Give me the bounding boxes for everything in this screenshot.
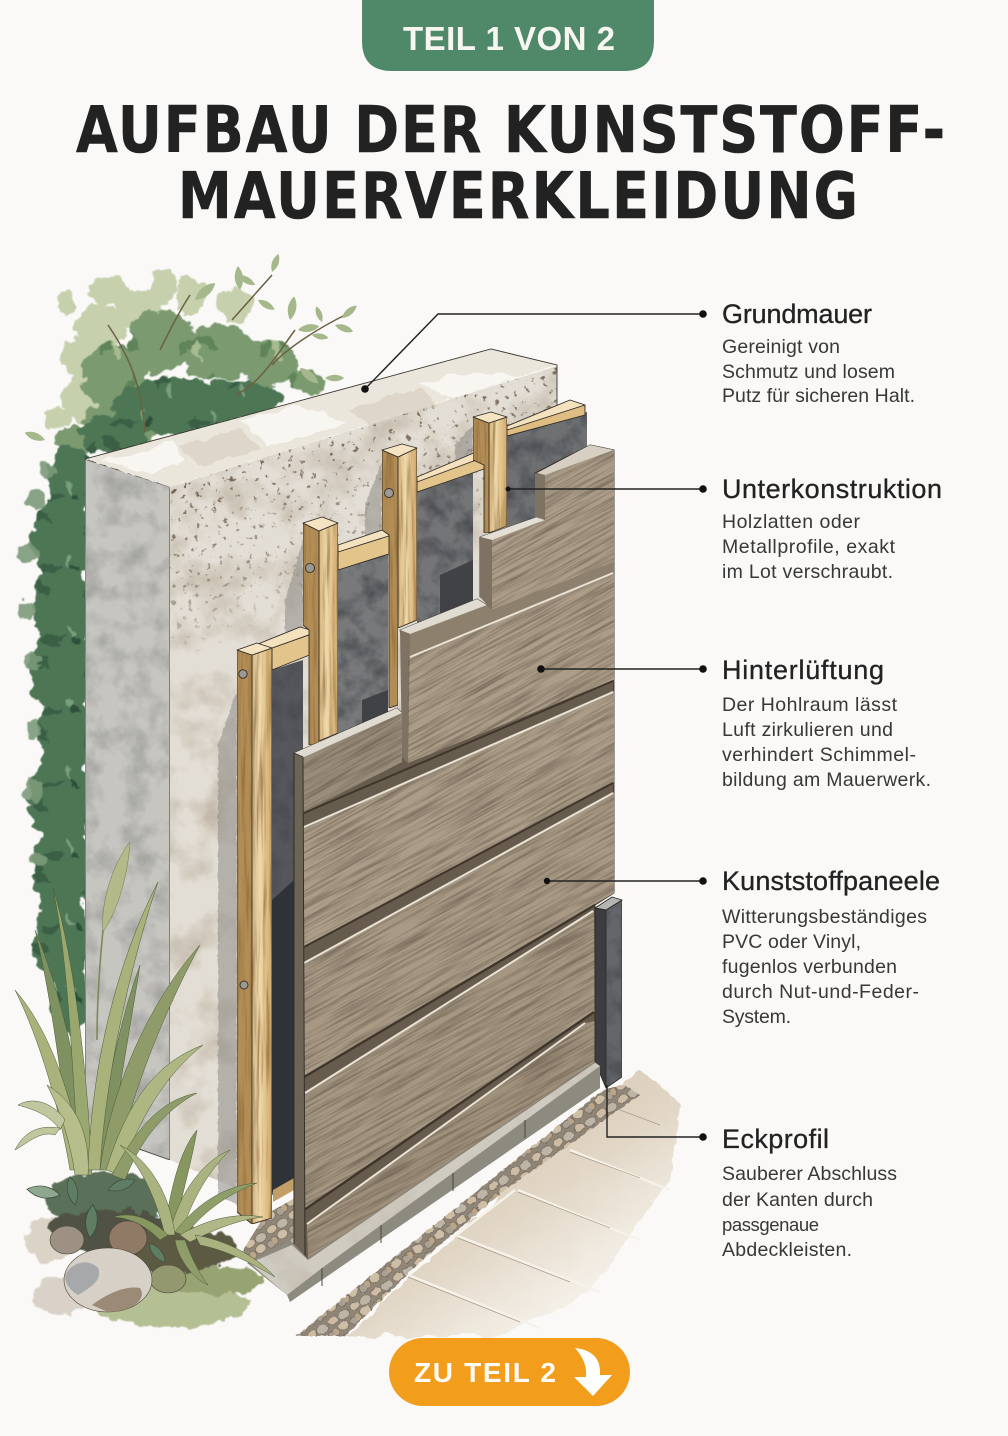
- description: System.: [722, 1006, 791, 1028]
- description: Metallprofile, exakt: [722, 536, 896, 558]
- wall front face: [170, 366, 557, 1190]
- badge: part 1 of 2: [362, 0, 654, 71]
- low leaves: [26, 1175, 168, 1265]
- gravel strip: [296, 1084, 640, 1336]
- panel long boards: [303, 691, 614, 1259]
- title: MAUERVERKLEIDUNG: [178, 158, 858, 233]
- post 2: [303, 517, 338, 745]
- panel shadow gaps and light tongues: [304, 573, 613, 1224]
- title: [76, 92, 945, 233]
- leader line: [506, 485, 707, 493]
- planting: [15, 842, 275, 1327]
- leader line: [537, 665, 707, 673]
- corner profile: [595, 897, 622, 1088]
- description: Luft zirkulieren und: [722, 719, 893, 741]
- rocks: [50, 1221, 186, 1312]
- button: to part 2: [389, 1338, 630, 1406]
- grass seed head: [97, 842, 130, 1040]
- description: Gereinigt von: [722, 336, 840, 358]
- callout: Grundmauer: [361, 299, 915, 407]
- post 3: [382, 444, 417, 708]
- heading: Eckprofil: [722, 1124, 829, 1154]
- description: Witterungsbeständiges: [722, 906, 927, 928]
- concrete wall: [85, 349, 557, 1205]
- screws: [239, 488, 394, 989]
- small plant blades: [113, 1130, 275, 1285]
- callout: Unterkonstruktion: [506, 474, 942, 583]
- membrane: [272, 412, 587, 1202]
- heading: Grundmauer: [722, 299, 872, 329]
- leader line: [544, 877, 707, 885]
- leader line: [361, 310, 707, 393]
- wall side face: [85, 459, 170, 1160]
- panel third short: [294, 708, 402, 813]
- description: passgenaue: [722, 1214, 819, 1235]
- post 1: [237, 643, 272, 1224]
- rails: [258, 400, 585, 670]
- description: PVC oder Vinyl,: [722, 931, 861, 953]
- panel left frame: [294, 753, 305, 1259]
- description: bildung am Mauerwerk.: [722, 769, 931, 791]
- leader line: [607, 1085, 707, 1141]
- heading: Unterkonstruktion: [722, 474, 942, 504]
- description: fugenlos verbunden: [722, 956, 897, 978]
- icon: curved arrow down: [574, 1348, 612, 1396]
- description: verhindert Schimmel-: [722, 744, 916, 766]
- plastic panels: [294, 444, 622, 1259]
- description: durch Nut-und-Feder-: [722, 981, 919, 1003]
- description: [722, 336, 915, 407]
- title: AUFBAU DER KUNSTSTOFF-: [76, 92, 945, 167]
- callout: Hinterlüftung: [537, 655, 931, 791]
- callout: Kunststoffpaneele: [544, 866, 940, 1028]
- description: der Kanten durch: [722, 1189, 873, 1211]
- paving and ground wash: [240, 1070, 680, 1336]
- description: Sauberer Abschluss: [722, 1163, 897, 1185]
- badge: part 1 of 2: TEIL 1 VON 2: [403, 20, 615, 57]
- illustration: wall cross-section: [14, 254, 681, 1400]
- ivy and foliage: [17, 253, 359, 1034]
- description: [722, 694, 931, 791]
- panel backing: [294, 445, 614, 1259]
- wall shadows: [218, 425, 473, 1205]
- gravel near post: [240, 1195, 300, 1268]
- timber battens: [237, 400, 585, 1224]
- post 4: [473, 412, 507, 533]
- description: [722, 906, 927, 1028]
- panel wood grain: [304, 450, 614, 1258]
- heading: Kunststoffpaneele: [722, 866, 940, 896]
- kerb stones: [247, 1062, 600, 1302]
- panel top notched: [480, 445, 614, 610]
- callout: Eckprofil: [607, 1085, 897, 1261]
- button: to part 2: ZU TEIL 2: [414, 1357, 556, 1388]
- description: Putz für sicheren Halt.: [722, 385, 915, 407]
- wall top face: [85, 349, 557, 487]
- description: Schmutz und losem: [722, 361, 895, 383]
- description: Der Hohlraum lässt: [722, 694, 898, 716]
- speckled band of wall: [170, 366, 557, 660]
- description: [722, 1163, 897, 1261]
- description: [722, 511, 896, 583]
- branches and leaves: [23, 253, 359, 443]
- panel second: [400, 562, 614, 763]
- description: Abdeckleisten.: [722, 1239, 852, 1261]
- description: im Lot verschraubt.: [722, 561, 893, 583]
- heading: Hinterlüftung: [722, 655, 884, 685]
- description: Holzlatten oder: [722, 511, 860, 533]
- large blades: [15, 882, 203, 1180]
- ground wash and moss: [26, 1172, 263, 1327]
